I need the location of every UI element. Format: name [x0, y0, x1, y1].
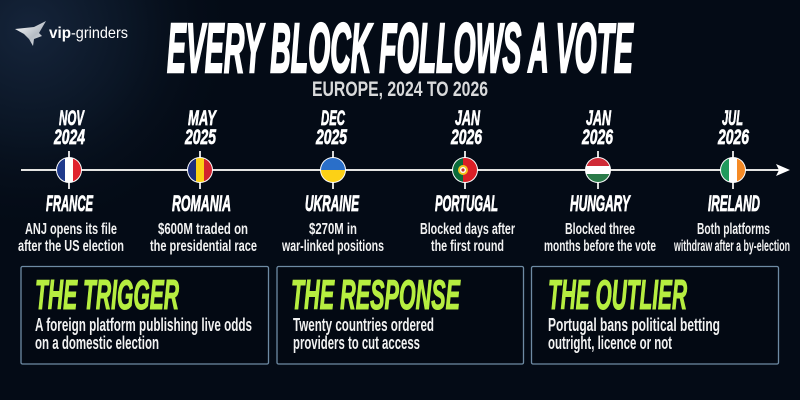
body text: A foreign platform publishing live odds: [35, 315, 252, 335]
description: after the US election: [18, 238, 124, 255]
description: [281, 221, 384, 255]
event: France: [18, 107, 124, 255]
timeline axis with arrow: [21, 164, 790, 176]
logo: vip-grinders: -grinders: [71, 25, 128, 42]
body text: [548, 315, 720, 353]
description: [150, 221, 257, 255]
logo: vip-grinders: [15, 21, 128, 46]
description: [673, 221, 790, 255]
event: Ukraine: [281, 107, 384, 255]
country: Ukraine: UKRAINE: [305, 191, 360, 216]
logo: vip-grinders: vip: [49, 25, 71, 42]
event: Hungary: [544, 107, 656, 255]
date: Jan 2026: 2026: [450, 126, 482, 149]
description: the presidential race: [150, 238, 257, 255]
body text: outright, licence or not: [548, 333, 672, 353]
date: Nov 2024: 2024: [53, 126, 85, 149]
date: Jul 2026: 2026: [717, 126, 749, 149]
heading: THE RESPONSE: [291, 271, 461, 318]
heading: THE TRIGGER: [35, 271, 179, 318]
date: Nov 2024: [53, 107, 85, 149]
date: May 2025: MAY: [188, 107, 217, 130]
subtitle: EUROPE, 2024 TO 2026: [312, 78, 488, 101]
date: Jul 2026: JUL: [722, 107, 743, 130]
panel: the outlier: [532, 266, 778, 364]
flag: France: [56, 151, 82, 189]
country: France: FRANCE: [46, 191, 94, 216]
body text: Portugal bans political betting: [548, 315, 720, 335]
date: Jan 2026: JAN: [455, 107, 480, 130]
flag: Ireland: [720, 151, 746, 189]
description: [544, 221, 656, 255]
description: $270M in: [309, 221, 357, 238]
date: May 2025: [184, 107, 217, 149]
date: Nov 2024: NOV: [59, 107, 85, 130]
description: Blocked three: [565, 221, 635, 238]
country: Hungary: HUNGARY: [570, 191, 631, 216]
date: May 2025: 2025: [184, 126, 216, 149]
flag: Portugal: [452, 151, 478, 189]
date: Dec 2025: [315, 107, 347, 149]
description: [420, 221, 515, 255]
flag: Ukraine: [320, 151, 346, 189]
date: Jan 2026: [450, 107, 482, 149]
description: Blocked days after: [420, 221, 515, 238]
date: Jan 2026: 2026: [581, 126, 613, 149]
description: war-linked positions: [281, 238, 384, 255]
event: Romania: [150, 107, 257, 255]
body text: on a domestic election: [35, 333, 159, 353]
body text: providers to cut access: [293, 333, 420, 353]
description: months before the vote: [544, 238, 656, 255]
date: Dec 2025: DEC: [321, 107, 345, 130]
description: [18, 221, 124, 255]
date: Jul 2026: [717, 107, 749, 149]
body text: Twenty countries ordered: [293, 315, 434, 335]
date: Dec 2025: 2025: [315, 126, 347, 149]
body text: [35, 315, 252, 353]
date: Jan 2026: JAN: [586, 107, 611, 130]
description: ANJ opens its file: [25, 221, 117, 238]
body text: [293, 315, 434, 353]
description: $600M traded on: [158, 221, 248, 238]
country: Romania: ROMANIA: [172, 191, 231, 216]
flag: Romania: [187, 151, 213, 189]
date: Jan 2026: [581, 107, 613, 149]
panel: the trigger: [21, 266, 268, 364]
event: Portugal: [420, 107, 515, 255]
panel: the response: [277, 266, 524, 364]
event: Ireland: [673, 107, 790, 255]
country: Portugal: PORTUGAL: [435, 191, 498, 216]
flag: Hungary: [585, 151, 611, 189]
description: the first round: [431, 238, 504, 255]
